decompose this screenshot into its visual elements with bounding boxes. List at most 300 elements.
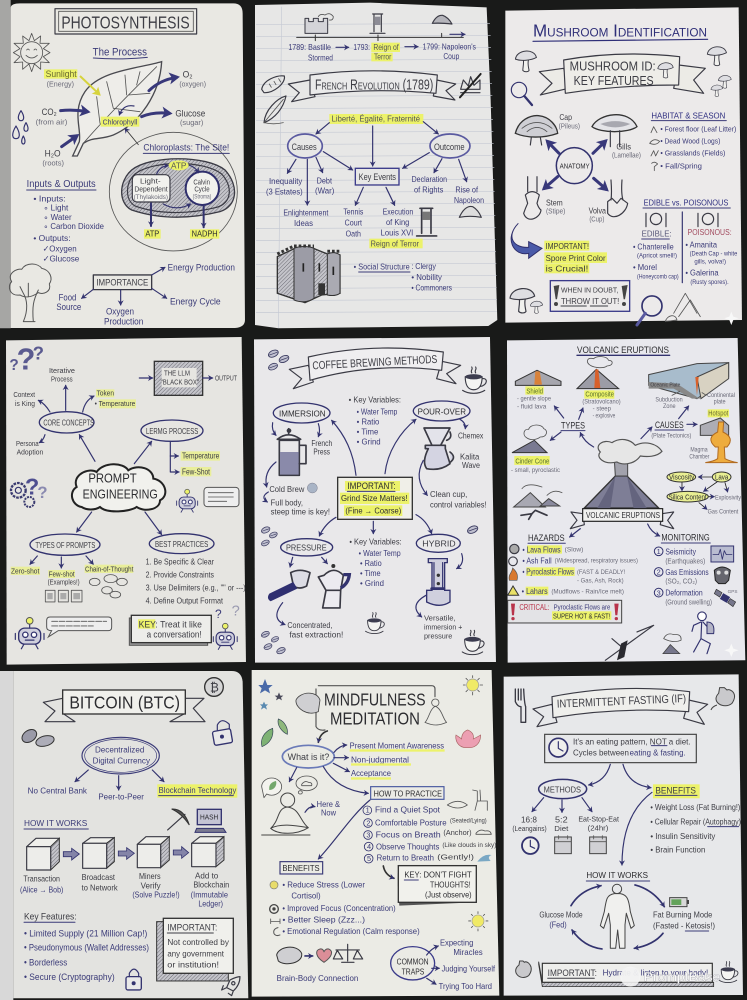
section: benefits: • Insulin Sensitivity	[650, 831, 716, 841]
banner: volcanic eruptions	[570, 509, 674, 537]
panel: coffee brewing	[254, 337, 496, 663]
timeline: 1789: Bastille	[288, 42, 331, 52]
meditating person with thought bubbles	[262, 776, 340, 835]
step labels	[20, 870, 230, 909]
section: importance: Energy Cycle	[170, 297, 221, 307]
node: methods: (Leangains)	[512, 824, 547, 833]
node: best practices	[146, 534, 246, 605]
type: shield: Shield	[526, 386, 543, 395]
node: types of prompts: TYPES OF PROMPTS	[35, 540, 96, 550]
section: edible vs poisonous: (Honeycomb cap)	[637, 274, 679, 281]
node: what is it	[282, 740, 445, 793]
section: benefits: • Reduce Stress (Lower	[282, 879, 365, 889]
label: H2O	[42, 148, 64, 168]
callout: important: IMPORTANT:	[167, 923, 217, 933]
section: how to practice: 3	[366, 830, 370, 839]
node: types of prompts: Few-shot	[49, 570, 75, 579]
central cloud: PROMPT	[88, 471, 137, 486]
llm black box: OUTPUT	[215, 374, 237, 383]
section: edible vs poisonous: gills, volva!)	[694, 260, 726, 266]
timeline: Terror	[374, 52, 391, 62]
arrow: O2 out	[149, 77, 177, 91]
central callout: (Fine → Coarse)	[345, 505, 402, 515]
icon: waving robot with question marks: ?	[232, 603, 240, 619]
node: immersion: Press	[313, 447, 330, 457]
callout: key: a conversation!	[147, 630, 202, 640]
node: lerming process: Few-Shot	[182, 466, 211, 476]
callout: important: Hydrate & listen to your body!	[603, 968, 708, 978]
section: edible vs poisonous: • Chanterelle	[633, 241, 674, 251]
callout: important: or institution!	[167, 960, 219, 970]
icon: bitcoin coin: ₿	[210, 681, 219, 695]
anatomy: stem: Stem	[546, 198, 563, 208]
icons: hazard symbols	[508, 544, 519, 595]
section: benefits: • Emotional Regulation (Calm response)	[282, 926, 420, 936]
section: habitat and season: • Forest floor (Leaf Litter)	[660, 124, 736, 133]
arrow: sunlight to leaf	[80, 76, 99, 94]
icons: benefits	[270, 881, 280, 936]
key features: • Secure (Cryptography)	[24, 972, 115, 982]
callout: when in doubt	[550, 281, 630, 311]
section: hazards: • Lava Flows	[522, 544, 561, 554]
node: outcome: Outcome	[434, 142, 465, 152]
section: how to practice: Return to Breath	[377, 853, 434, 863]
section: benefits	[280, 862, 420, 936]
anatomy: center circle	[544, 141, 606, 189]
title banner: French Revolution (1789)	[315, 77, 433, 93]
title: MINDFULNESS	[324, 690, 426, 710]
node: core concepts: Process	[51, 374, 73, 383]
label: glucose mode: Glucose Mode	[539, 910, 583, 920]
section: habitat and season: • Fall/Spring	[660, 161, 702, 170]
heading: causes: (Plate Tectonics)	[651, 432, 691, 439]
text: cold brew: Cold Brew	[269, 484, 305, 494]
section: benefits: BENEFITS	[655, 786, 696, 796]
section: benefits: • Brain Function	[650, 844, 706, 854]
node: key events: Louis XVI	[381, 228, 413, 238]
label: H2O: H₂O	[45, 148, 61, 158]
node: best practices: 4. Define Output Format	[146, 595, 224, 605]
node: types of prompts: Chain-of-Thought	[85, 564, 133, 573]
lava concept map	[667, 472, 742, 515]
step labels: to Network	[82, 882, 118, 892]
common traps: Judging Yourself	[442, 964, 496, 974]
title: VOLCANIC ERUPTIONS	[577, 345, 669, 355]
icon: quill	[264, 96, 286, 124]
icon: magnifier and forest	[637, 293, 700, 325]
heading: causes	[641, 406, 697, 439]
type: shield: - gentle slope	[517, 396, 551, 403]
type: shield: - fluid lava	[517, 404, 547, 411]
heading: the process: The Process	[93, 46, 147, 58]
node: key events: Execution	[383, 206, 414, 216]
label: glucose: Glucose	[175, 108, 205, 118]
timeline	[288, 14, 476, 62]
chloroplast zoom circle: Cycle	[194, 185, 210, 194]
section: benefits	[650, 784, 741, 854]
timeline: Reign of	[373, 42, 399, 52]
heading: how it works: HOW IT WORKS	[586, 870, 648, 880]
brain body connection	[277, 944, 363, 983]
section: monitoring: Seismicity	[665, 547, 697, 557]
section: monitoring: 1	[657, 547, 661, 556]
panel: intermittent fasting	[504, 674, 743, 996]
icon: waving robot with question marks: ?	[215, 607, 222, 621]
label: sunlight: Sunlight	[46, 69, 77, 79]
section: how to practice: Find a Quiet Spot	[375, 805, 441, 815]
node: causes: Debt	[317, 175, 333, 185]
icon: water drops	[13, 111, 28, 144]
section: monitoring: (Earthquakes)	[665, 556, 705, 565]
llm black box: "BLACK BOX"	[161, 377, 199, 386]
icon: waving robot with question marks	[213, 603, 240, 649]
callout: key: KEY: Treat it like	[139, 619, 202, 629]
step labels: (Solve Puzzle!)	[132, 890, 180, 900]
label: CO2: (from air)	[36, 117, 67, 126]
list: key variables top: • Time	[357, 427, 379, 437]
icon: cup top right	[463, 367, 486, 393]
callout: critical: Pyroclastic Flows are	[554, 602, 610, 611]
icon: bitcoin coin	[205, 678, 223, 696]
node: methods: Diet	[554, 824, 568, 833]
page	[252, 670, 499, 997]
lava concept map: Lava	[715, 473, 729, 482]
page	[6, 337, 246, 665]
node: types of prompts	[11, 534, 133, 602]
banner: key features: KEY FEATURES	[574, 74, 654, 88]
node: pour over: Chemex	[458, 431, 484, 441]
icon: bastille fortress	[277, 246, 341, 303]
section: hazards: (FAST & DEADLY!	[577, 569, 625, 576]
anatomy: volva	[589, 180, 628, 223]
callout: key: (Just observe)	[425, 890, 472, 900]
section: importance	[56, 263, 235, 326]
list: key variables bottom: • Key Variables:	[349, 537, 402, 547]
panel: photosynthesis	[0, 0, 245, 328]
node: decentralized digital currency	[28, 737, 237, 801]
anatomy: gills: Gills	[616, 141, 631, 151]
node: decentralized digital currency: Digital Currency	[93, 756, 151, 766]
anatomy: cap: Cap	[559, 112, 572, 122]
social structure: • Commoners	[411, 283, 452, 293]
section: habitat and season: • Grasslands (Fields)	[660, 148, 725, 157]
section: how to practice: 4	[367, 842, 371, 851]
label: sunlight	[44, 69, 77, 88]
icon: lotus	[456, 730, 481, 748]
section: how to practice: (Gently!)	[437, 852, 474, 861]
icons: stars	[258, 679, 283, 710]
type: cinder cone	[511, 425, 560, 474]
node: core concepts: Adoption	[17, 448, 43, 457]
section: edible vs poisonous: • Amanita	[685, 240, 717, 250]
node: causes	[266, 134, 353, 228]
section: hazards: • Ash Fall	[522, 556, 552, 566]
timeline: 1793:	[353, 42, 370, 52]
section: importance: Production	[104, 316, 143, 326]
text: cold brew	[264, 483, 330, 516]
step labels: (Alice → Bob)	[20, 884, 64, 894]
node: methods: (24hr)	[588, 824, 608, 833]
section: inputs and outputs	[27, 179, 104, 264]
icon: cloud and wave	[476, 830, 492, 862]
banner: key features: MUSHROOM ID:	[570, 60, 656, 74]
callout: key: KEY: DON'T FIGHT	[404, 869, 472, 879]
node: core concepts: Context	[13, 390, 35, 399]
icon: running person	[692, 612, 714, 654]
lava concept map: Viscosity	[669, 473, 695, 482]
node: pour over	[413, 401, 484, 470]
central cloud	[72, 464, 165, 511]
step labels: Verify	[141, 880, 161, 890]
type: shield	[515, 370, 561, 411]
node: pressure: PRESSURE	[286, 543, 327, 553]
icon: question marks: ?	[17, 342, 35, 376]
icon: rocket	[222, 977, 240, 996]
section: importance: Energy Production	[168, 263, 235, 273]
icon: question marks: ?	[9, 357, 19, 374]
anatomy: stem: (Stipe)	[546, 206, 565, 215]
icons: corner mushrooms	[515, 47, 731, 97]
icon: hash computer: HASH	[200, 813, 218, 822]
central volcano	[584, 439, 662, 509]
node: methods: 5:2	[555, 814, 568, 824]
step labels: Miners	[139, 871, 161, 881]
node: causes: (3 Estates)	[266, 186, 303, 196]
section: inputs and outputs: ∘ Light	[43, 203, 69, 213]
section: inputs and outputs: ∘ Carbon Dioxide	[43, 221, 104, 231]
label: O2: (oxygen)	[179, 80, 206, 89]
section: importance: Food	[59, 293, 76, 303]
definition box: eating & fasting.	[630, 748, 686, 758]
section: benefits: BENEFITS	[282, 863, 320, 873]
section: habitat and season: • Dead Wood (Logs)	[660, 136, 720, 145]
section: how to practice	[318, 787, 496, 863]
node: decentralized digital currency: No Central Bank	[28, 785, 88, 795]
common traps: Miracles	[453, 947, 483, 957]
chloroplast zoom circle: (Stroma)	[193, 194, 211, 200]
anatomy: cap	[515, 112, 580, 145]
anatomy: volva: Volva	[589, 205, 606, 215]
anatomy: volva: (Cup)	[589, 214, 604, 223]
key features: • Limited Supply (21 Million Cap!)	[24, 928, 147, 938]
icon: question marks: ?	[33, 342, 44, 363]
callout: important: IMPORTANT!	[546, 241, 589, 251]
node: key events: Key Events	[359, 172, 396, 182]
icon: padlock bottom	[126, 969, 141, 990]
section: how to practice: Comfortable Posture	[375, 817, 447, 827]
section: inputs and outputs: ∘ Water	[43, 212, 72, 222]
key features: • Borderless	[24, 958, 68, 968]
node: outcome: Rise of	[455, 185, 479, 195]
list: key variables top	[349, 395, 401, 447]
timeline: Coup	[443, 51, 460, 61]
section: edible vs poisonous: POISONOUS:	[688, 227, 732, 237]
callout: important	[157, 918, 233, 981]
node: key events: Oath	[346, 228, 361, 238]
causes: diagram: Oceanic Plate	[650, 383, 680, 389]
causes: diagram: plate	[714, 398, 726, 405]
section: benefits: • Better Sleep (Zzz...)	[282, 914, 365, 924]
motto	[316, 114, 438, 166]
heading: types: TYPES	[561, 421, 585, 431]
icon: guillotine	[417, 208, 437, 236]
node: core concepts: Token	[97, 389, 114, 398]
timeline: Stormed	[308, 52, 333, 62]
icon: gps satellite	[714, 589, 737, 607]
title banner	[289, 348, 461, 389]
section: benefits: Cortisol)	[291, 890, 321, 900]
title banner	[533, 688, 708, 727]
text: clean cup	[430, 489, 487, 510]
icon: tree	[9, 264, 51, 322]
text: versatile: immersion +	[424, 623, 462, 632]
icon: sun top	[463, 676, 483, 695]
sparkle	[724, 644, 739, 657]
type: composite: - steep	[593, 406, 611, 413]
common traps	[391, 938, 496, 991]
type: cinder cone: - small, pyroclastic	[511, 467, 560, 474]
title: MEDITATION	[330, 708, 420, 728]
icon: pour over dripper	[424, 428, 453, 469]
node: causes: Inequality	[269, 176, 303, 186]
type: composite: - explosive	[593, 413, 616, 420]
node: key events: of King	[386, 217, 410, 227]
text: cold brew: Full body,	[271, 497, 303, 507]
node: what is it: Non-judgmental	[351, 754, 409, 764]
label: glucose	[175, 108, 205, 127]
icon: aeropress	[427, 559, 450, 605]
meditating person with thought bubbles: Here &	[317, 799, 340, 809]
sparkle	[724, 312, 739, 325]
label: glucose: (sugar)	[180, 118, 203, 127]
key features: Key Features:	[24, 912, 77, 922]
causes: diagram	[649, 363, 735, 410]
icon: crown crossed out	[460, 74, 481, 97]
section: hazards: • Pyroclastic Flows	[522, 567, 574, 577]
icon: stomach	[711, 688, 734, 710]
section: benefits: • Improved Focus (Concentration)	[282, 903, 396, 913]
chloroplast zoom circle: Calvin	[193, 177, 210, 186]
node: lerming process	[141, 420, 220, 476]
icon: seismograph	[711, 546, 734, 562]
node: core concepts: CORE CONCEPTS	[43, 418, 94, 428]
step labels: Blockchain	[193, 880, 230, 890]
section: edible vs poisonous: (Rusty spores).	[690, 279, 729, 286]
panel: bitcoin	[0, 671, 248, 1000]
node: core concepts: Iterative	[49, 366, 75, 375]
node: pressure	[281, 539, 333, 567]
arrows from center	[77, 435, 162, 535]
icon: question marks	[9, 342, 44, 376]
chloroplast zoom circle: Light-	[140, 177, 161, 186]
causes: diagram: Continental	[707, 392, 735, 399]
node: causes: Enlightenment	[283, 207, 329, 217]
hotspot diagram: Chamber	[689, 453, 709, 460]
section: how to practice: 5	[367, 854, 371, 863]
section: how to practice: (Like clouds in sky)	[442, 842, 496, 849]
icon: coffee beans top	[267, 349, 290, 371]
node: core concepts	[13, 366, 136, 457]
node: causes: Ideas	[294, 218, 313, 228]
icon: robot with speech bubble	[177, 487, 239, 512]
section: how to practice: Focus on Breath	[376, 830, 441, 840]
section: how to practice: HOW TO PRACTICE	[374, 788, 442, 798]
label: sunlight: (Energy)	[47, 79, 74, 88]
panel: prompt engineering	[6, 337, 246, 665]
icons: stomach and cup bottom	[516, 961, 738, 983]
node: immersion: French	[311, 438, 333, 448]
callout: important	[539, 962, 714, 987]
key features: • Pseudonymous (Wallet Addresses)	[24, 943, 149, 953]
cycle arrows	[571, 885, 664, 949]
label: H2O: (roots)	[42, 159, 64, 168]
definition box	[545, 734, 696, 763]
node: causes: Causes	[292, 142, 317, 152]
icon: mushroom group	[510, 289, 543, 313]
icon: gears and question: ?	[37, 483, 48, 502]
node: types of prompts: Zero-shot	[11, 566, 39, 575]
node: methods: 16:8	[521, 814, 537, 824]
anatomy: gills	[592, 115, 641, 159]
meditating person with thought bubbles: Now	[321, 808, 337, 818]
llm black box: THE LLM	[164, 369, 190, 378]
section: habitat and season	[650, 111, 736, 171]
section: monitoring: 3	[657, 588, 661, 597]
section: edible vs poisonous	[633, 197, 738, 286]
icon: sun	[13, 33, 50, 72]
title: PHOTOSYNTHESIS	[61, 12, 190, 32]
label: glucose mode	[539, 910, 583, 929]
big curved arrow	[511, 223, 542, 258]
label: CO2: CO₂	[42, 107, 57, 117]
section: importance: Source	[56, 302, 81, 312]
arrow: to what is it	[318, 731, 327, 742]
section: monitoring: (Ground swelling)	[665, 597, 712, 606]
node: core concepts: Persona	[16, 439, 39, 448]
arrow: glucose out	[142, 113, 169, 117]
icon: gears and question	[11, 474, 48, 507]
text: concentrated: fast extraction!	[289, 630, 343, 640]
icon: gears and question: ?	[25, 474, 39, 500]
chloroplast zoom circle: (Thylakoids)	[134, 194, 168, 201]
notebook page	[0, 671, 13, 1000]
icon: padlock top	[212, 721, 233, 746]
page	[505, 7, 742, 323]
icon: magnifier	[511, 82, 532, 105]
central callout: IMPORTANT:	[347, 481, 396, 491]
node: pour over: POUR-OVER	[418, 406, 466, 416]
node: decentralized digital currency: Peer-to-Peer	[98, 791, 144, 801]
central cloud: ENGINEERING	[83, 487, 158, 502]
label: fat burning mode: Fat Burning Mode	[653, 910, 713, 920]
section: how to practice: (Anchor)	[443, 828, 472, 837]
node: key events	[343, 168, 414, 238]
text: concentrated: Concentrated,	[287, 620, 332, 630]
heading: types	[550, 406, 594, 447]
icon: beans	[260, 524, 479, 547]
node: outcome: of Rights	[414, 185, 443, 195]
icon: cushion and chair	[447, 790, 487, 810]
node: causes: (War)	[315, 186, 335, 196]
label: chlorophyll	[101, 106, 139, 127]
icon: human body	[600, 884, 634, 948]
definition box: It's an eating pattern, NOT a diet.	[573, 736, 691, 746]
causes: diagram: Subduction	[655, 397, 683, 404]
node: core concepts: • Temperature	[95, 399, 135, 408]
arrow: CO2 in	[61, 110, 87, 112]
arrows from callout	[266, 419, 432, 536]
node: outcome: Declaration	[412, 174, 447, 184]
